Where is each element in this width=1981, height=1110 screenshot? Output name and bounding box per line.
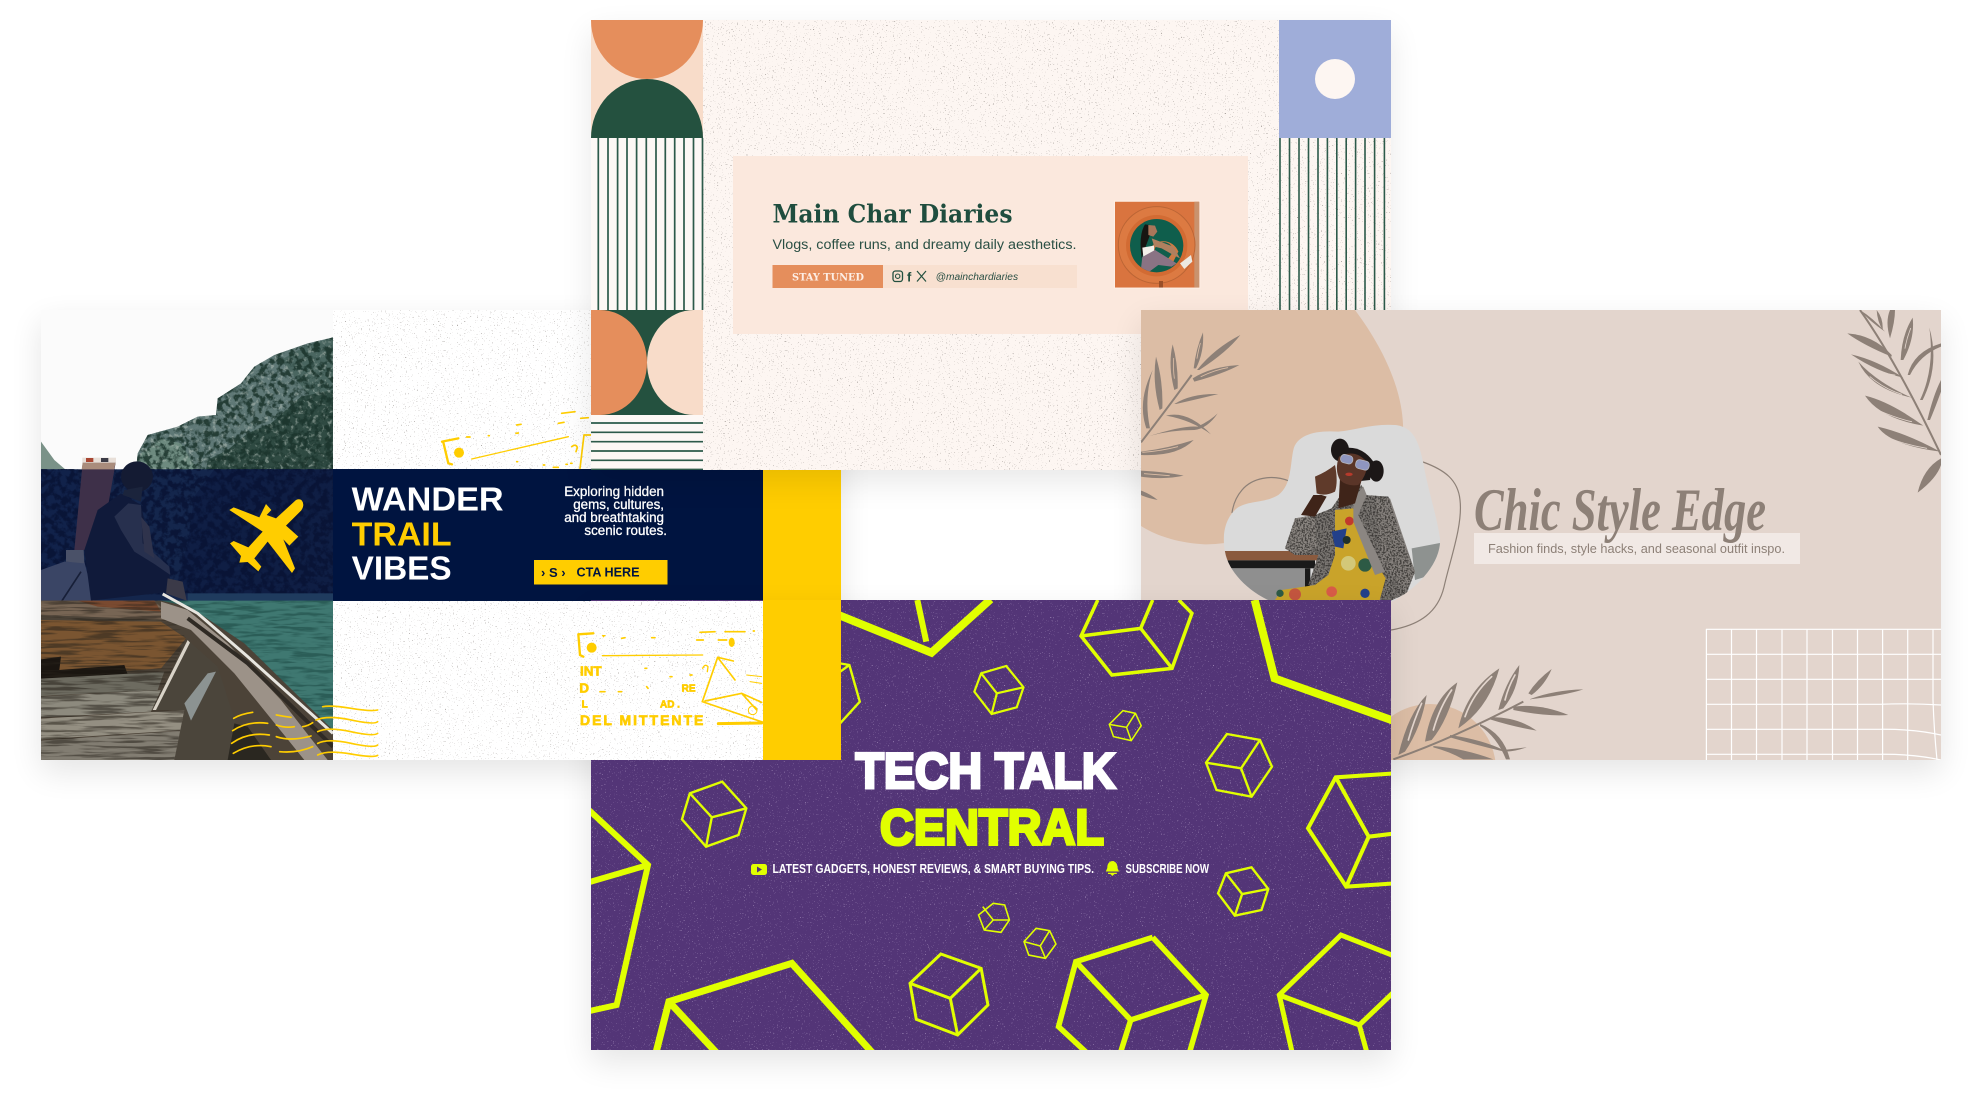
- grid: [1706, 629, 1941, 760]
- panel: travel banner lower part overlapping the purple banner: [545, 600, 841, 760]
- right geometric strip: [1279, 20, 1391, 310]
- text: travel description: Exploring hidden: [564, 484, 664, 499]
- lower postmark stamp: AD .: [660, 700, 680, 711]
- panel: Main Char Diaries lifestyle banner: [591, 20, 1391, 482]
- arm and hand: [1301, 495, 1327, 517]
- title: TECH TALK CENTRAL: CENTRAL: [880, 800, 1104, 856]
- text: subscribe: SUBSCRIBE NOW: [1126, 861, 1210, 876]
- icons: social: [892, 270, 926, 282]
- text: WANDER TRAIL VIBES: TRAIL: [352, 516, 452, 553]
- lower postmark stamp: RE: [682, 684, 696, 695]
- title: TECH TALK CENTRAL: [854, 752, 1118, 846]
- content panel: [733, 156, 1248, 334]
- postmark waves: [232, 706, 378, 756]
- blob: tan shape: [1141, 310, 1403, 544]
- text: travel description: scenic routes.: [584, 523, 667, 538]
- photo: woman in blazer: [1224, 424, 1440, 602]
- left geometric strip: [591, 20, 703, 470]
- title: Main Char Diaries: Main Char Diaries: [772, 200, 1012, 230]
- text: travel description: gems, cultures,: [573, 497, 664, 512]
- button: stay tuned: STAY TUNED: [792, 271, 864, 283]
- text: handle: @mainchardiaries: [936, 272, 1018, 283]
- leaves: top right sprig: [1847, 310, 1941, 493]
- icon: bell: [1106, 861, 1119, 876]
- man: [84, 461, 187, 601]
- leaves: top left sprig: [1141, 332, 1240, 500]
- upper postmark stamp: [442, 412, 591, 468]
- mast: [74, 463, 116, 550]
- text: travel description: [564, 484, 667, 538]
- lower postmark stamp: L: [582, 700, 588, 711]
- outline blob: [1232, 462, 1460, 630]
- leaves: bottom sprig: [1393, 665, 1583, 759]
- cube pattern: [585, 595, 1396, 1053]
- button: CTA here: CTA HERE: [576, 565, 640, 580]
- subtitle panel: [1474, 533, 1800, 564]
- text: WANDER TRAIL VIBES: VIBES: [352, 550, 452, 587]
- icons: social: f: [907, 270, 912, 284]
- portrait photo: [1114, 201, 1200, 289]
- panel: Chic Style Edge fashion banner: [1141, 310, 1941, 836]
- lower postmark stamp: INT: [580, 664, 602, 679]
- subtitle panel: Fashion finds, style hacks, and seasonal outfit inspo.: [1488, 541, 1785, 556]
- title: TECH TALK CENTRAL: TECH TALK: [856, 743, 1116, 799]
- lower postmark stamp: [578, 631, 763, 728]
- panel: Tech Talk Central banner: [585, 595, 1396, 1062]
- button: CTA here: › S ›: [541, 565, 566, 580]
- title: Chic Style Edge: Chic Style Edge: [1474, 477, 1766, 543]
- icon: airplane: [229, 499, 303, 573]
- panel: Wander Trail Vibes travel banner: [41, 310, 841, 772]
- jacket: [1285, 485, 1415, 605]
- lower postmark stamp: DEL MITTENTE: [580, 712, 703, 728]
- boat deck in band: [41, 562, 94, 601]
- lower postmark stamp: D: [579, 681, 589, 696]
- neck and head: [1338, 478, 1362, 508]
- subtitle: Vlogs, coffee runs, and dreamy daily aesthetics.: [772, 237, 1076, 253]
- button: CTA here: [534, 560, 668, 584]
- boat: [41, 601, 333, 760]
- button: stay tuned: [772, 265, 883, 288]
- text: WANDER TRAIL VIBES: [352, 488, 503, 580]
- tagline: LATEST GADGETS, HONEST REVIEWS, & SMART BUYING TIPS.: [772, 861, 1094, 876]
- icon: video play: [751, 864, 767, 875]
- photo: man on a longtail boat: [41, 310, 334, 761]
- dress: [1272, 508, 1386, 605]
- text: travel description: and breathtaking: [564, 510, 664, 525]
- bar: social handle: [883, 265, 1077, 288]
- text: WANDER TRAIL VIBES: WANDER: [352, 482, 504, 519]
